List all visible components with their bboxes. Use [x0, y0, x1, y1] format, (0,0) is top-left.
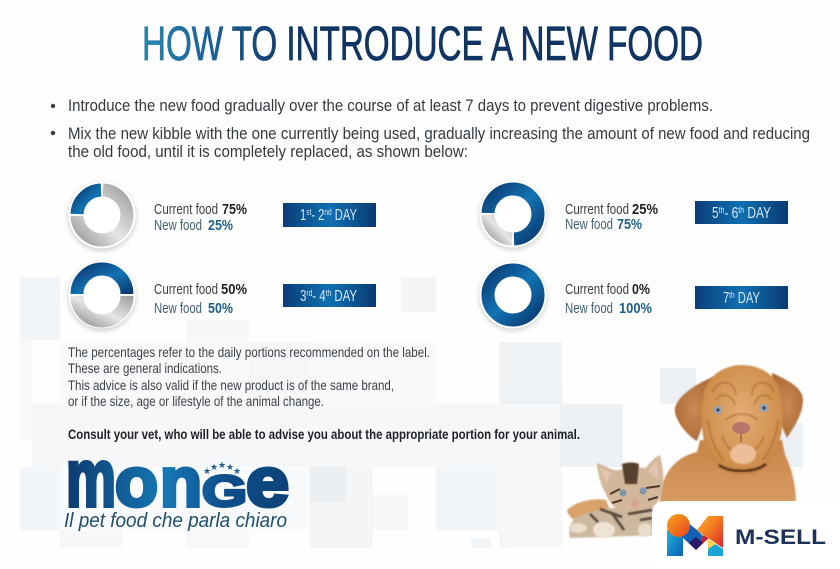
donut: 75% new food: [479, 180, 547, 250]
label: 50 / 50: Current food: [154, 281, 218, 298]
Monge logo: ★: [210, 462, 218, 472]
day badge: 3rd-4th: th: [326, 288, 331, 298]
bullet list: the old food, until it is completely replaced, as shown below:: [68, 142, 468, 161]
Monge logo: e: [246, 443, 289, 521]
label: 0 / 100: 100%: [619, 300, 652, 317]
day badge: 3rd-4th: [283, 284, 376, 307]
day badge: 5th-6th: 5: [712, 205, 721, 222]
day badge: 3rd-4th: DAY: [331, 288, 357, 305]
bullet list: [51, 96, 810, 161]
label: 0 / 100: [565, 281, 652, 317]
label: 50 / 50: [154, 281, 247, 317]
Monge logo: Il pet food che parla chiaro: [64, 510, 287, 532]
day badge: 5th-6th: th: [738, 205, 744, 215]
label: 75 / 25: 75%: [222, 201, 247, 218]
day badge: 5th-6th: DAY: [744, 205, 771, 222]
Monge logo: ★: [233, 466, 241, 476]
label: 0 / 100: New food: [565, 300, 613, 317]
label: 50 / 50: New food: [154, 300, 202, 317]
day badge: 3rd-4th: rd: [306, 288, 312, 298]
donut: 50% new food: [68, 262, 136, 331]
Monge logo: ★: [218, 460, 226, 470]
notes text block: or if the size, age or lifestyle of the animal change.: [68, 393, 324, 409]
dog photo: [660, 365, 803, 502]
label: 25 / 75: New food: [565, 216, 613, 233]
day badge: 5th-6th: [695, 201, 788, 224]
day badge: 1st-2nd: nd: [324, 207, 332, 217]
label: 50 / 50: 50%: [208, 300, 233, 317]
day badge: 7th: 7: [723, 290, 732, 307]
label: 0 / 100: 0%: [632, 281, 650, 298]
Monge logo: [64, 433, 289, 532]
Monge logo: o: [115, 443, 158, 521]
notes text block: These are general indications.: [68, 360, 222, 376]
day badge: 1st-2nd: - 2: [311, 207, 324, 224]
M-SELL watermark card: M-SELL: [735, 526, 826, 549]
day badge: 1st-2nd: 1: [300, 207, 309, 224]
day badge: 7th: DAY: [735, 290, 760, 307]
day badge: 1st-2nd: DAY: [332, 207, 357, 224]
label: 75 / 25: [154, 201, 247, 234]
day badge: 1st-2nd: [283, 203, 376, 227]
day badge: 5th-6th: - 6: [724, 205, 738, 222]
label: 75 / 25: Current food: [154, 201, 218, 218]
donut: 25% new food: [68, 182, 136, 251]
day badge: 3rd-4th: - 4: [312, 288, 326, 305]
label: 75 / 25: 25%: [208, 217, 233, 234]
Monge logo: G: [202, 467, 247, 516]
M-SELL icon: [667, 514, 723, 556]
Monge logo: ★: [226, 462, 234, 472]
notes text block: This advice is also valid if the new product is of the same brand,: [68, 377, 394, 393]
kitten photo: [567, 455, 663, 538]
M-SELL watermark card: [652, 501, 840, 569]
label: 25 / 75: Current food: [565, 201, 629, 218]
day badge: 1st-2nd: st: [306, 207, 312, 217]
label: 50 / 50: 50%: [221, 281, 247, 298]
label: 25 / 75: [565, 201, 658, 233]
label: 25 / 75: 25%: [632, 201, 658, 218]
day badge: 7th: th: [729, 290, 735, 300]
Monge logo: m: [66, 433, 116, 524]
notes text block: The percentages refer to the daily portions recommended on the label.: [68, 344, 430, 360]
day badge: 3rd-4th: 3: [300, 288, 309, 305]
bullet list: Introduce the new food gradually over the course of at least 7 days to prevent digestive problems.: [68, 96, 713, 115]
Monge logo: ★: [203, 466, 211, 476]
vet advice: Consult your vet, who will be able to advise you about the appropriate portion for your animal.: [68, 426, 580, 442]
label: 75 / 25: New food: [154, 217, 202, 234]
Monge logo: n: [160, 443, 202, 521]
day badge: 7th: [695, 286, 788, 309]
label: 25 / 75: 75%: [617, 216, 642, 233]
donut: 100% new food: [479, 262, 547, 331]
notes text block: [68, 344, 430, 409]
label: 0 / 100: Current food: [565, 281, 629, 298]
day badge: 5th-6th: th: [719, 205, 724, 215]
